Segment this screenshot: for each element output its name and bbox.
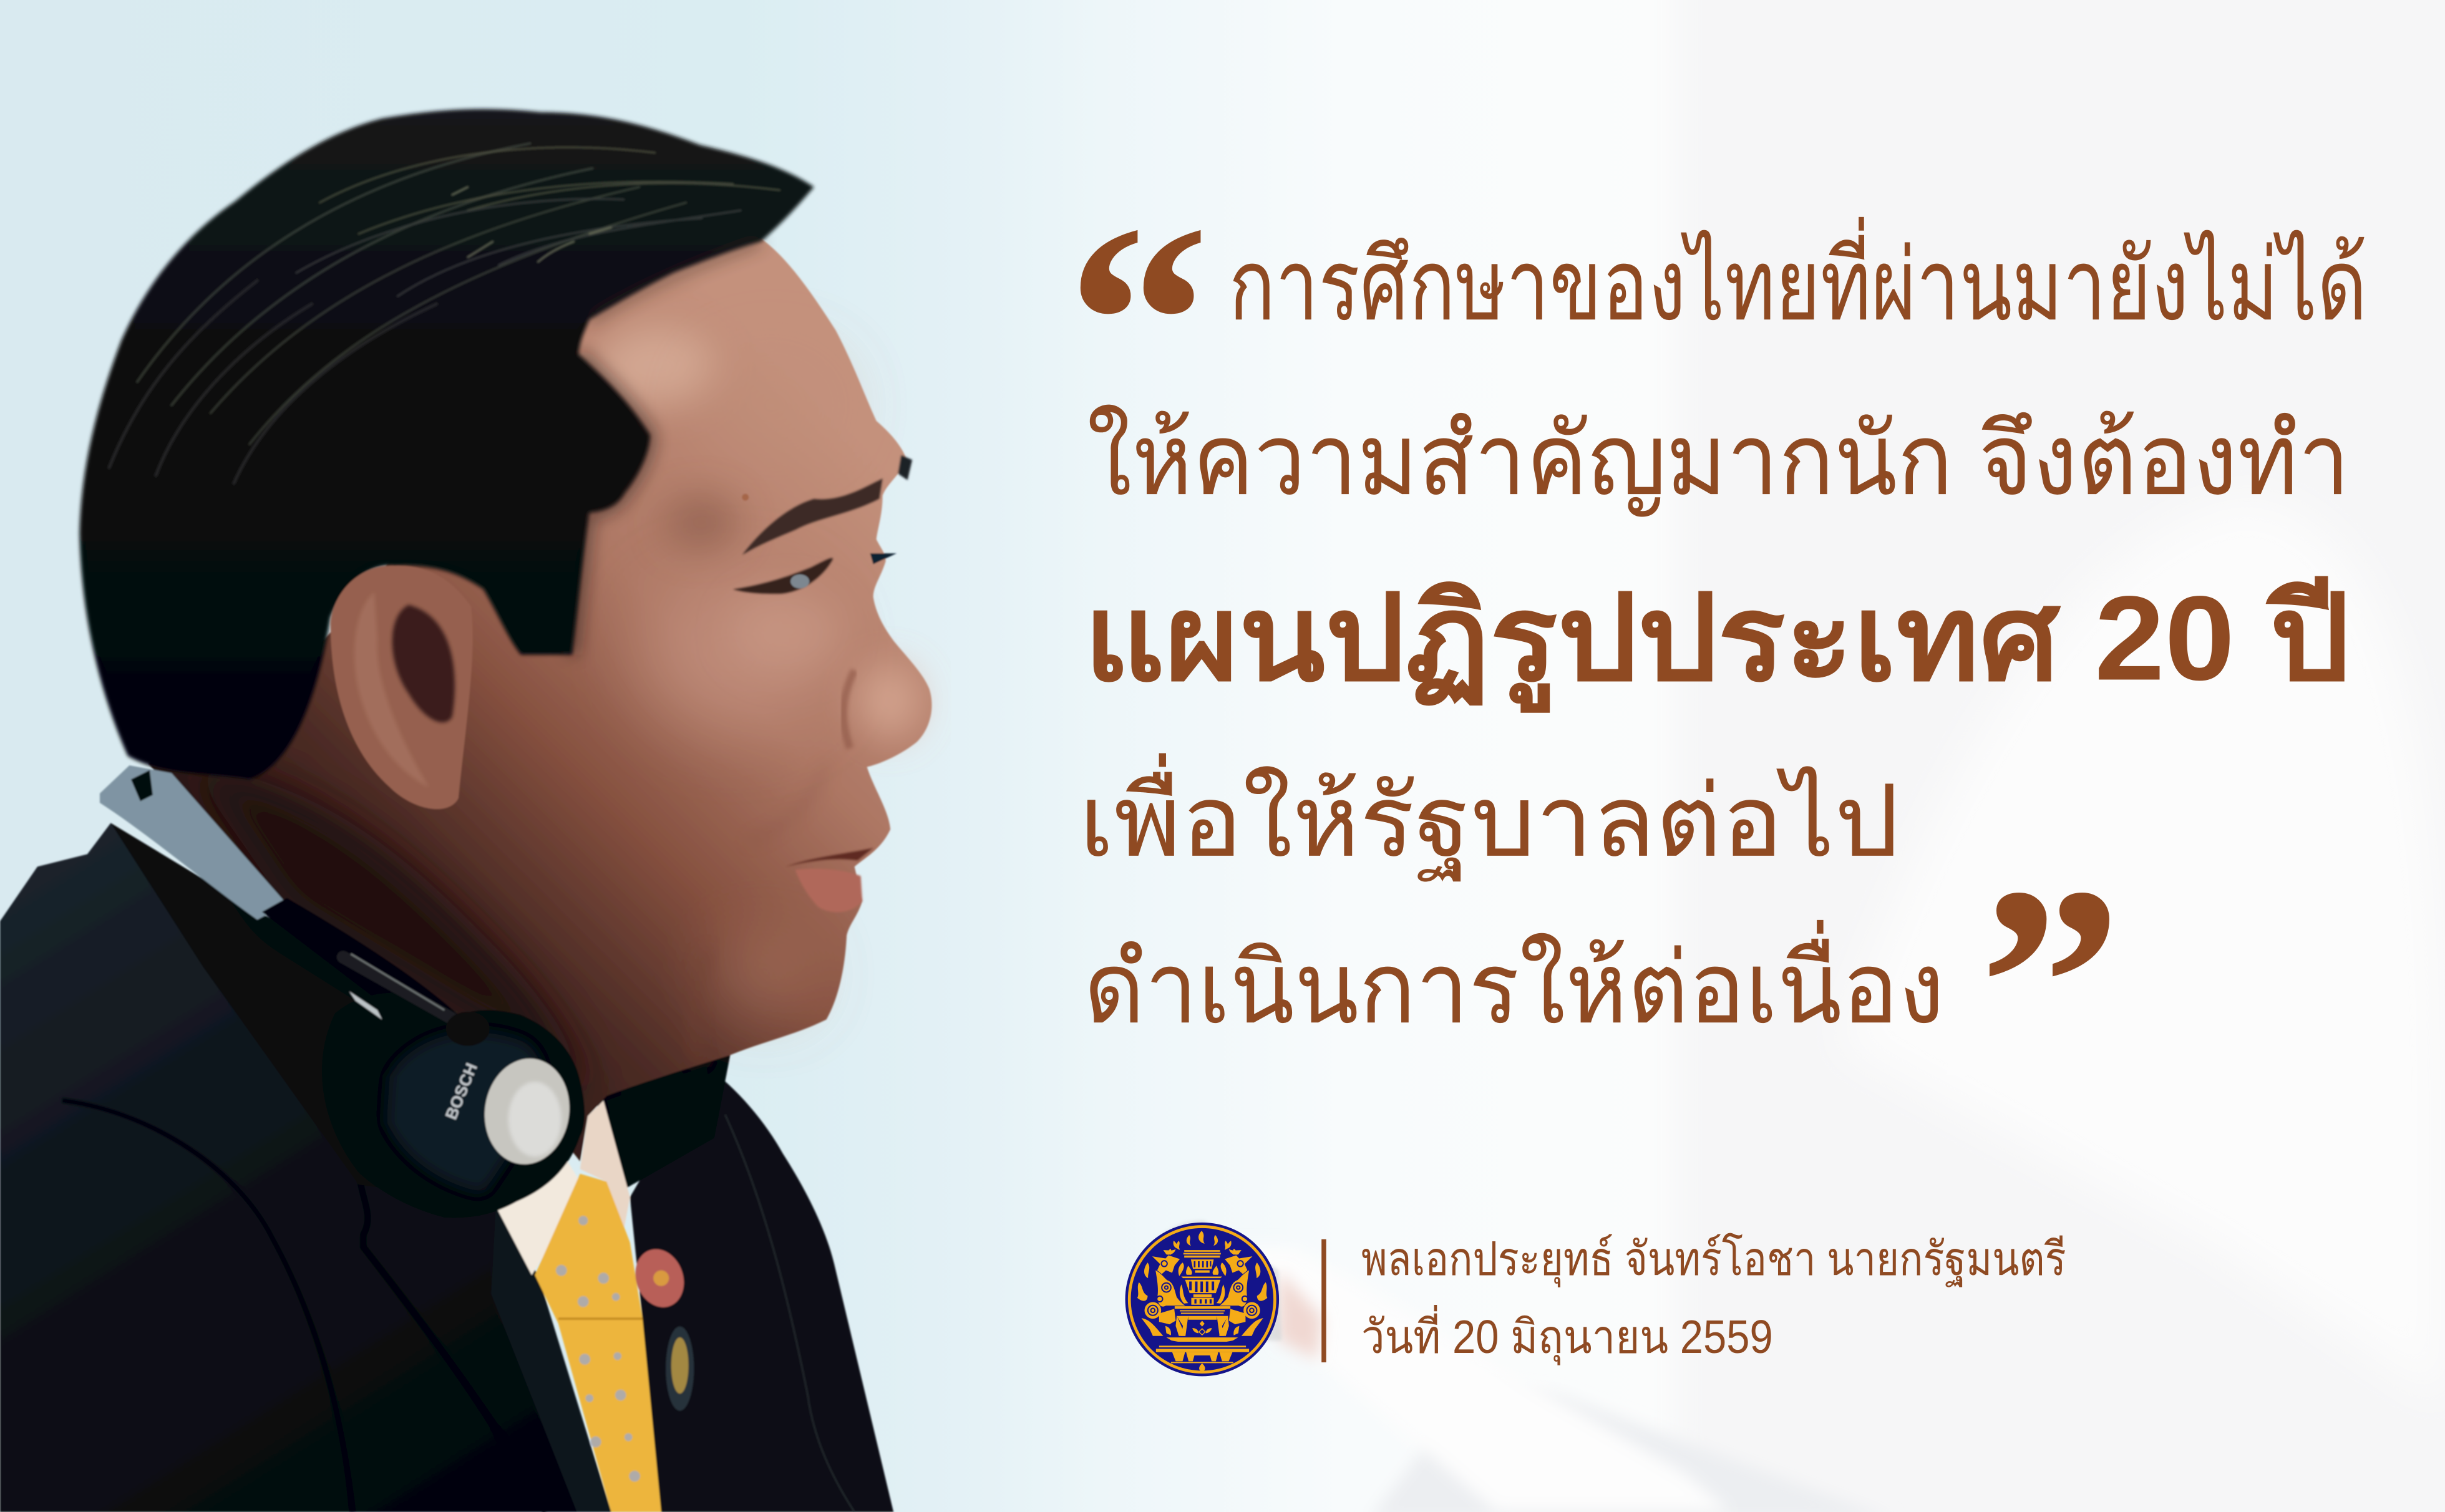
neck and face: [148, 203, 932, 1161]
dark area under the chin: [590, 1041, 733, 1188]
hair strands: [109, 143, 780, 483]
urn cut-outs: [1189, 1261, 1214, 1334]
suit jacket: [0, 823, 893, 1512]
ear: [331, 566, 473, 809]
ear pad body: [322, 993, 585, 1218]
headset brand: BOSCH: [442, 1060, 481, 1122]
hair: [79, 109, 814, 779]
far ear pad: [606, 1066, 708, 1172]
quote line 3 highlighted: แผนปฏิรูปประเทศ 20 ปี: [1084, 571, 2350, 714]
necktie: [535, 1174, 661, 1512]
base: [1167, 1337, 1238, 1342]
attribution: [1361, 1233, 2066, 1365]
fuzzy hairline: [572, 354, 650, 655]
faded background shapes: [1185, 0, 2445, 1512]
quote line 2: ให้ความสำคัญมากนัก จึงต้องทำ: [1087, 404, 2350, 517]
quote text block: [1067, 168, 2367, 1138]
quote line 4: เพื่อให้รัฐบาลต่อไป: [1079, 753, 1899, 882]
closing quotation mark: ”: [1979, 831, 2122, 1138]
mouth: [786, 848, 873, 912]
face shading: [187, 326, 920, 1091]
urn: [1184, 1250, 1220, 1252]
quote line 5: ดำเนินการให้ต่อเนื่อง: [1084, 919, 1945, 1044]
opening quotation mark: “: [1067, 168, 1210, 475]
portrait of the prime minister in profile: [0, 109, 932, 1512]
right lion (mirrored): [1213, 1241, 1267, 1336]
shirt front: [580, 1100, 630, 1247]
seal drop shadow: [1143, 1221, 1281, 1340]
left lion: [1137, 1241, 1192, 1336]
dark jacket collar under headset: [110, 823, 530, 1208]
divider line: [1321, 1239, 1326, 1362]
flames: [1168, 1231, 1237, 1255]
shirt collar: [496, 1161, 580, 1275]
neckband: [100, 765, 287, 919]
date: วันที่ 20 มิถุนายน 2559: [1361, 1305, 1773, 1365]
government seal: [1125, 1223, 1279, 1376]
eyebrow and eye: [733, 455, 912, 594]
speaker name and title: พลเอกประยุทธ์ จันทร์โอชา นายกรัฐมนตรี: [1361, 1233, 2066, 1287]
lapel pins: [628, 1243, 694, 1411]
table legs: [1177, 1316, 1188, 1336]
tray: [1175, 1306, 1230, 1309]
headset: [100, 765, 708, 1218]
